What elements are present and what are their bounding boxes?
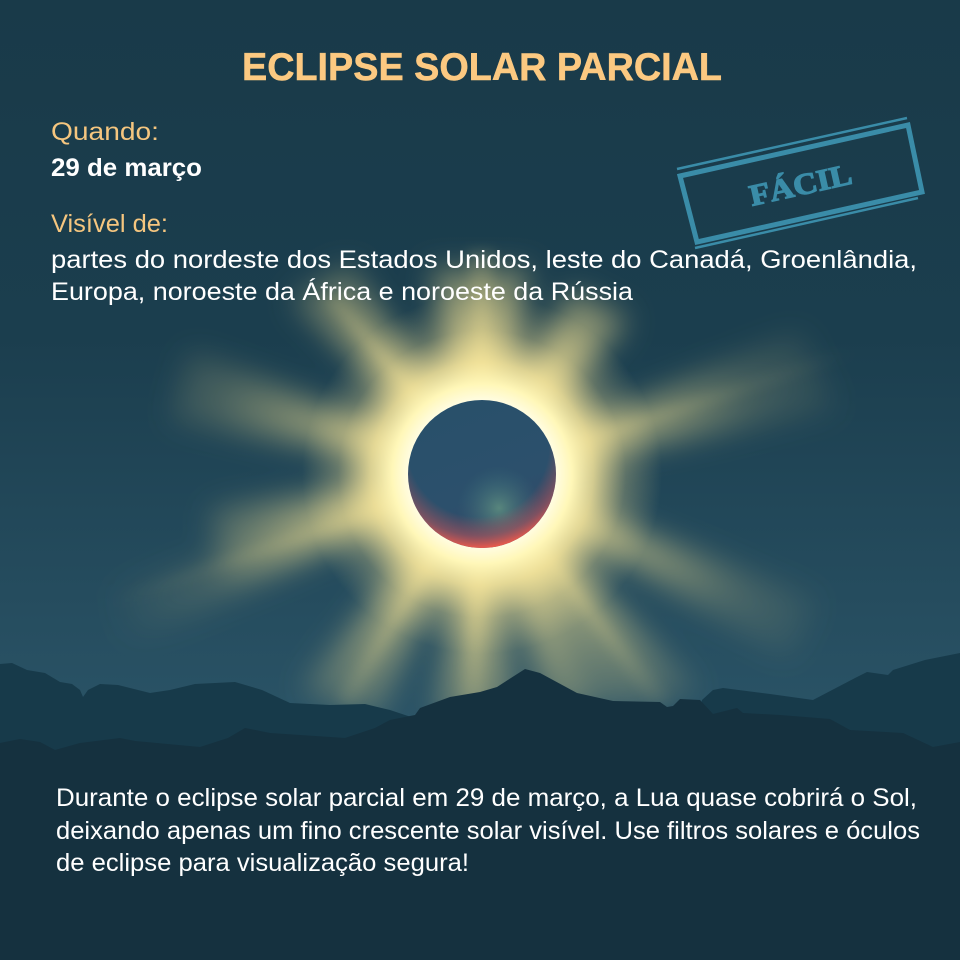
visible from text [51, 246, 917, 306]
when date: 29 de março [51, 154, 202, 182]
description text: deixando apenas um fino crescente solar visível. Use filtros solares e óculos [56, 817, 920, 845]
visible from text: partes do nordeste dos Estados Unidos, leste do Canadá, Groenlândia, [51, 246, 917, 274]
description text [56, 784, 920, 877]
when label: Quando: [51, 118, 159, 146]
description text: Durante o eclipse solar parcial em 29 de março, a Lua quase cobrirá o Sol, [56, 784, 917, 812]
front mountains [0, 669, 960, 960]
difficulty stamp [677, 118, 922, 248]
back mountains [0, 653, 960, 790]
visible from label: Visível de: [51, 210, 168, 238]
moon disc [408, 400, 556, 548]
difficulty stamp: FÁCIL [746, 158, 855, 213]
description text: de eclipse para visualização segura! [56, 849, 469, 877]
sun corona with rays [60, 250, 955, 720]
visible from text: Europa, noroeste da África e noroeste da Rússia [51, 277, 633, 306]
title: ECLIPSE SOLAR PARCIAL [242, 46, 722, 89]
